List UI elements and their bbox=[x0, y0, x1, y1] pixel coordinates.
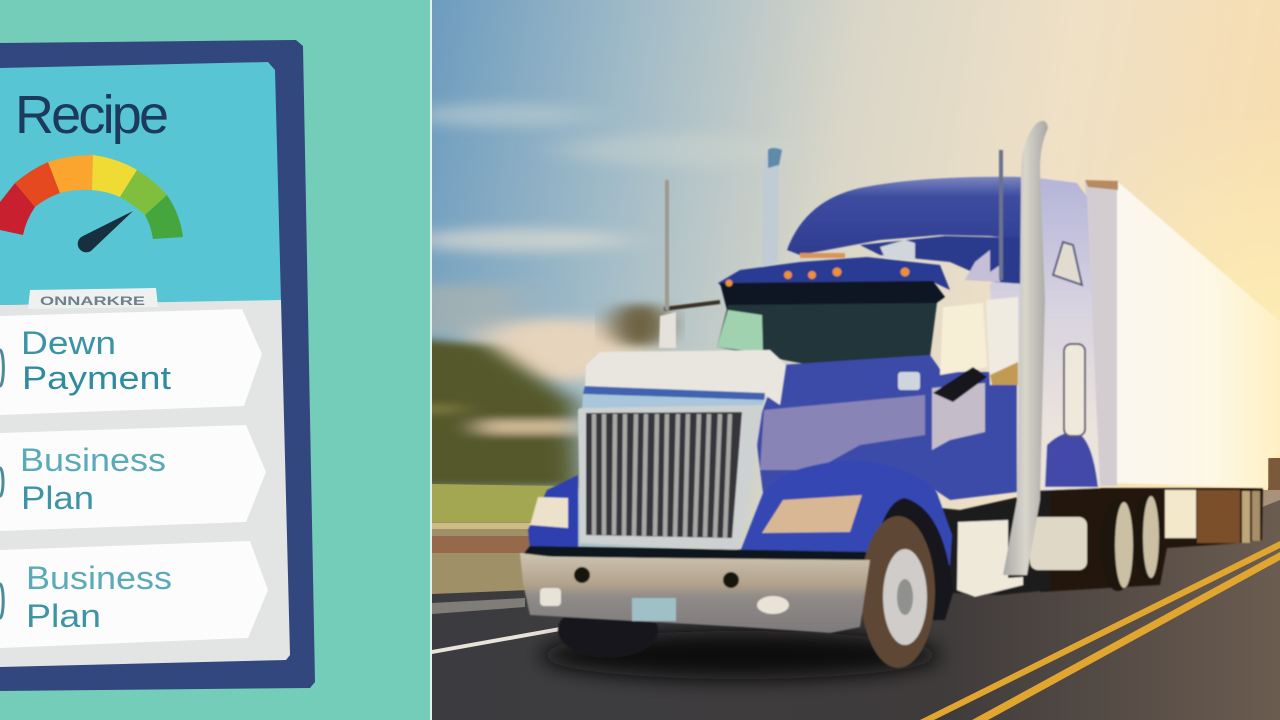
clouds bbox=[432, 99, 720, 388]
sleeper bbox=[990, 177, 1100, 492]
distant dark tree blob bbox=[612, 303, 668, 347]
sleeper window bbox=[1053, 242, 1082, 285]
front wheel bbox=[861, 498, 953, 668]
left exhaust tip bbox=[768, 148, 782, 168]
rear axle area bbox=[1040, 488, 1263, 592]
truck shadow bbox=[540, 631, 940, 679]
body reflection bbox=[760, 395, 925, 470]
step: Down Payment bbox=[0, 309, 262, 415]
road yellow lines bbox=[920, 541, 1280, 720]
panel: teal background bbox=[0, 0, 430, 720]
small label: ONNARKRE bbox=[40, 294, 145, 308]
underbody dark bbox=[942, 492, 1050, 596]
step: Business Plan 2 bbox=[0, 541, 268, 648]
far right tree line bbox=[1268, 458, 1280, 492]
roof fairing bbox=[787, 177, 1025, 255]
hood bbox=[585, 350, 786, 405]
far road glare bbox=[1262, 490, 1280, 507]
door reflection bbox=[932, 383, 985, 450]
sky bbox=[432, 0, 1280, 600]
grille bbox=[578, 405, 763, 550]
antennas bbox=[665, 180, 669, 310]
step: Business Plan bbox=[0, 425, 266, 531]
mirror panel bbox=[986, 297, 1018, 385]
card lower section bbox=[0, 300, 290, 667]
step: Down Payment: Payment bbox=[22, 360, 171, 396]
visor bbox=[718, 257, 950, 290]
windshield bbox=[717, 303, 937, 365]
sleeper blue lower bbox=[1045, 432, 1098, 487]
side window bbox=[940, 303, 987, 375]
white divider bbox=[430, 0, 432, 720]
panel: recipe card bbox=[0, 40, 315, 691]
trailer bbox=[1085, 180, 1280, 538]
bumper bbox=[520, 553, 870, 633]
front tire left bbox=[558, 602, 658, 658]
sun glow bbox=[1186, 233, 1280, 490]
road lane white bbox=[432, 627, 560, 654]
step and fuel tank bbox=[957, 517, 1087, 597]
door and cab body bbox=[755, 355, 1017, 500]
road bbox=[432, 490, 1280, 720]
gauge needle bbox=[78, 211, 133, 252]
step: Business Plan 2: Plan bbox=[26, 598, 101, 634]
step: Business Plan 2: Business bbox=[26, 560, 172, 596]
blurred trees bbox=[432, 334, 583, 491]
step: Down Payment: Dewn bbox=[21, 325, 116, 361]
card top screen bbox=[0, 62, 281, 305]
cab lights bbox=[726, 253, 910, 286]
front fender right bbox=[740, 460, 952, 565]
bumper top shadow bbox=[522, 546, 870, 562]
heading: Recipe: Recipe bbox=[15, 85, 169, 145]
guard rail and verge bbox=[432, 522, 532, 594]
small label bbox=[28, 288, 158, 309]
card frame bbox=[0, 40, 315, 691]
left exhaust stack bbox=[762, 147, 782, 267]
headlights bbox=[762, 495, 862, 533]
truck bbox=[520, 121, 1280, 668]
sleeper door panel bbox=[1064, 344, 1085, 436]
mirror bar left bbox=[664, 302, 720, 309]
step: Business Plan: Business bbox=[20, 442, 166, 478]
panel: highway photo bbox=[340, 0, 1280, 720]
right exhaust stack bbox=[1003, 121, 1048, 575]
step: Business Plan: Plan bbox=[21, 480, 94, 516]
grass bbox=[432, 484, 560, 523]
front fender left bbox=[528, 475, 578, 548]
rear wheels bbox=[1100, 491, 1260, 591]
gauge bbox=[0, 155, 183, 252]
